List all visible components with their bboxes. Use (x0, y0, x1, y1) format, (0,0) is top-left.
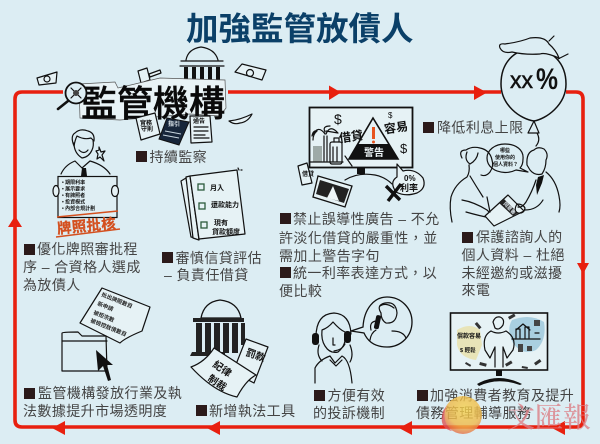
sign bullet list: • 投資模式 (62, 198, 85, 206)
icon: folder with data sheet and cursor: 被檢控放債數目 (89, 316, 128, 338)
item: consumer education: 加強消費者教育及提升 (430, 388, 574, 404)
icon: balloon with interest rate: % (536, 63, 558, 96)
item: protect personal data (462, 229, 565, 298)
sign bullet list (62, 179, 95, 212)
yellow bubble with advice: $ 輕鬆 (460, 346, 476, 354)
advert words: 容易 (383, 118, 409, 136)
item: new enforcement tools: 新增執法工具 (209, 403, 296, 419)
advert words: 借貸 (338, 127, 364, 145)
item: regulator publishes data: 法數據提升市場透明度 (23, 403, 167, 419)
item: no misleading advertising: 統一利率表達方式，以 (293, 265, 437, 281)
item: complaint mechanism (313, 388, 385, 421)
item: no misleading advertising: 禁止誤導性廣告 – 不允 (293, 211, 440, 227)
item: consumer education: 債務管理輔導服務 (416, 405, 531, 421)
item: no misleading advertising: 需加上警告字句 (279, 248, 380, 264)
icon: book code of practice: 守則 (141, 125, 153, 133)
discipline document (191, 348, 256, 397)
scattered banknotes (465, 314, 541, 369)
icon: banknote left (37, 72, 57, 85)
advert words (334, 111, 409, 156)
yellow bubble with advice (457, 326, 482, 360)
item: continuous monitoring: 持續監察 (150, 149, 207, 165)
icon: dark guideline book: 指引 (168, 120, 180, 128)
sign bullet list: • 有牌照者 (62, 192, 85, 199)
item: no misleading advertising (279, 211, 440, 299)
right person (527, 148, 547, 174)
item: no misleading advertising: 便比較 (279, 283, 322, 299)
discipline document: 紀律 (210, 358, 234, 380)
item: prudent credit assessment: 審慎信貸評估 (176, 250, 262, 266)
hand squeezing balloon (500, 36, 568, 59)
advert words: $ (400, 141, 408, 156)
icon: folder with data sheet and cursor: 批出牌照數目 (100, 290, 134, 310)
heading text: 監管機構 (81, 83, 225, 124)
icon: folder with data sheet and cursor: 新申請 (96, 299, 115, 313)
item: consumer education (416, 388, 574, 421)
item: protect personal data: 保護諮詢人的 (476, 229, 563, 245)
watermark: Wen Wei Po logo (442, 396, 591, 436)
item: protect personal data: 來電 (462, 282, 490, 298)
icon: capitol building (180, 47, 224, 84)
palm tree and suitcase (310, 126, 352, 166)
document on table: 同意書 (502, 200, 517, 216)
icon: banknote curled (229, 114, 252, 124)
title: 加強監管放債人 (186, 11, 414, 47)
zero interest bubble: 0% (404, 174, 416, 183)
speech bubble: 哪些 (500, 147, 510, 154)
sign bullet list: • 展示要求 (62, 186, 85, 192)
item: complaint mechanism: 方便有效 (328, 388, 385, 404)
rate text: xx (510, 67, 534, 93)
icon: person holding licence sign (53, 130, 118, 218)
item: optimise licensing: 優化牌照審批程 (37, 241, 138, 257)
small tablet (313, 176, 352, 207)
icon: balloon with interest rate (500, 36, 568, 146)
icon: call centre agent (312, 297, 412, 383)
speech bubble with caller (351, 297, 412, 347)
item: prudent credit assessment: – 負責任借貸 (164, 267, 249, 283)
item: complaint mechanism: 的投訴機制 (313, 405, 385, 421)
icon: book code of practice (136, 113, 160, 140)
small phone: 借貸 (302, 170, 314, 178)
checklist entries (198, 184, 240, 236)
checklist entries: 貸款額度 (212, 227, 240, 236)
warning triangle: 警告 (364, 146, 384, 159)
checklist entries: 還款能力 (211, 200, 239, 209)
item: lower interest cap: 降低利息上限 (437, 120, 524, 136)
item: optimise licensing: 序 – 合資格人選成 (23, 259, 141, 275)
heading backing shape (79, 78, 226, 120)
item: protect personal data: 未經邀約或滋擾 (462, 265, 562, 281)
checklist entries: 月入 (210, 184, 224, 192)
advert words: $ (334, 111, 342, 127)
icon: folder with data sheet and cursor (62, 288, 150, 381)
item: optimise licensing (23, 241, 141, 293)
icon: checklist documents (181, 168, 245, 240)
stamp: licence approval: 牌照批核 (56, 214, 117, 238)
watermark: Wen Wei Po logo: 文匯報 (507, 396, 591, 436)
sign bullet list: • 期限利率 (62, 179, 85, 186)
blue cloud with properties (509, 317, 545, 352)
icon: circular notice: 通告 (193, 117, 205, 125)
item: prudent credit assessment (162, 250, 262, 283)
item: regulator publishes data: 監管機構發放行業及執 (38, 385, 182, 401)
icon: book code of practice: 實務 (140, 119, 152, 127)
cable (345, 174, 392, 184)
speech bubble: 使用你的 (495, 154, 515, 161)
zero interest bubble: 利率 (400, 182, 418, 193)
icon: dark guideline book (159, 118, 189, 145)
flow loop: red arrow border (8, 86, 589, 435)
item: optimise licensing: 為放債人 (23, 277, 81, 293)
speech bubble (487, 144, 528, 172)
icon: circular notice (190, 116, 212, 143)
icon: magnifying glass (58, 82, 86, 109)
icon: gavel (138, 68, 161, 83)
item: protect personal data: 個人資料 – 杜絕 (462, 247, 565, 263)
left person (461, 147, 492, 160)
checklist entries: 現有 (214, 218, 228, 227)
icon: courthouse with sanctions documents (190, 300, 268, 397)
icon: two people consultation (450, 144, 560, 226)
discipline document: 制裁 (205, 372, 229, 394)
sign bullet list: • 內部合規計劃 (62, 205, 95, 212)
icon: banknote right (235, 64, 266, 80)
heading illustration: regulator (37, 47, 266, 145)
fine document: 罰款 (244, 346, 267, 365)
yellow bubble with advice: 償款容易 (457, 332, 481, 340)
cross mark (386, 184, 401, 201)
icon: monitor with warning advert (298, 108, 424, 207)
item: regulator publishes data (23, 385, 182, 419)
icon: folder with data sheet and cursor: 被拒宗數 (92, 308, 116, 324)
icon: monitor with consumer education (450, 313, 548, 386)
speech bubble: 個人資料？ (493, 161, 518, 168)
zero interest bubble (393, 164, 424, 195)
person with empty pockets (484, 317, 514, 367)
advert words: $ (388, 111, 393, 120)
item: no misleading advertising: 許淡化借貸的嚴重性，並 (279, 230, 438, 246)
